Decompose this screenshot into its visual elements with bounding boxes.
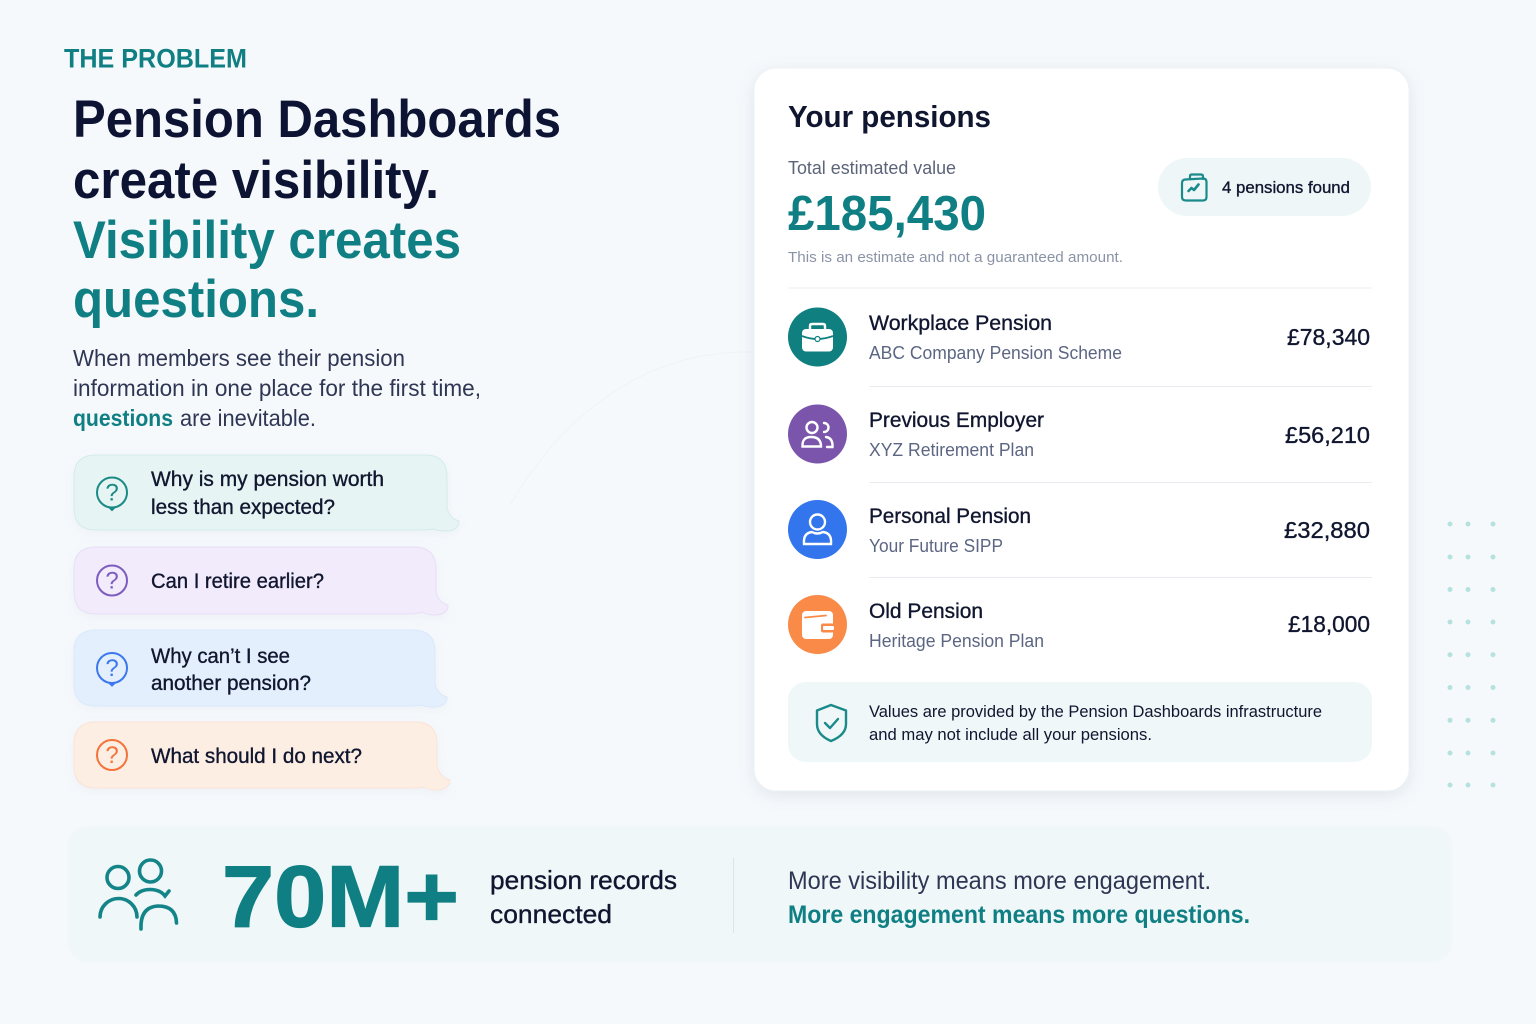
- row: workplace pension: Workplace Pension: [869, 311, 1052, 335]
- card heading: Your pensions: [788, 99, 991, 134]
- row: previous employer: XYZ Retirement Plan: [869, 440, 1034, 460]
- question bubble: another pension: Why can’t I see: [151, 645, 290, 668]
- intro paragraph: [73, 345, 481, 431]
- icon: question orange: [97, 740, 127, 770]
- title: create visibility.: [73, 151, 439, 210]
- row: old pension: [788, 595, 1370, 654]
- row: personal pension: Your Future SIPP: [869, 536, 1003, 556]
- icon: shield check: [817, 705, 846, 741]
- icon: wallet: [788, 595, 847, 654]
- title: Pension Dashboards: [73, 90, 561, 149]
- closing message: [788, 867, 1250, 929]
- row: workplace pension: [788, 308, 1370, 366]
- question bubble: retire earlier: [74, 547, 448, 615]
- row: previous employer: [788, 404, 1370, 464]
- icon: people: [788, 404, 847, 464]
- estimate disclaimer: This is an estimate and not a guaranteed amount.: [788, 249, 1123, 266]
- icon: question blue: [97, 653, 127, 686]
- closing message: More engagement means more questions.: [788, 901, 1250, 929]
- icon: briefcase: [788, 308, 847, 366]
- intro paragraph: questions: [73, 405, 173, 431]
- closing message: More visibility means more engagement.: [788, 867, 1211, 895]
- row: workplace pension: £78,340: [1287, 324, 1370, 350]
- icon: question orange: ?: [105, 742, 119, 769]
- total value label: Total estimated value: [788, 158, 956, 178]
- icon: question purple: ?: [105, 568, 119, 594]
- icon: question blue: ?: [105, 655, 119, 682]
- question bubble: another pension: another pension?: [151, 672, 311, 695]
- intro paragraph: are inevitable.: [180, 405, 316, 431]
- title: [73, 90, 561, 329]
- row: previous employer: £56,210: [1285, 422, 1370, 448]
- title: questions.: [73, 270, 319, 329]
- intro paragraph: When members see their pension: [73, 345, 405, 371]
- icon: question purple: [97, 566, 127, 596]
- icon: people group: [100, 860, 176, 929]
- decorative dot grid: [1448, 522, 1496, 788]
- stat label: [490, 865, 677, 929]
- callout: data source note: Values are provided by the Pension Dashboards infrastructure: [869, 703, 1322, 721]
- total value: £185,430: [788, 187, 986, 241]
- title: Visibility creates: [73, 211, 461, 270]
- stat label: connected: [490, 899, 612, 929]
- row: personal pension: £32,880: [1284, 517, 1370, 543]
- intro paragraph: information in one place for the first time,: [73, 375, 481, 401]
- callout: data source note: and may not include all your pensions.: [869, 726, 1152, 744]
- row: old pension: Old Pension: [869, 599, 983, 623]
- icon: question teal: ?: [105, 480, 119, 506]
- stat: 70M+: 70M+: [222, 848, 459, 946]
- pill: pensions found: [1158, 158, 1371, 216]
- eyebrow: the problem: THE PROBLEM: [64, 44, 247, 74]
- row: personal pension: Personal Pension: [869, 504, 1031, 528]
- row: personal pension: [788, 500, 1370, 559]
- question bubble: retire earlier: Can I retire earlier?: [151, 570, 324, 593]
- icon: briefcase chart: [1182, 174, 1206, 200]
- icon: person: [788, 500, 847, 559]
- question bubble: another pension: [74, 630, 447, 707]
- panel: bottom stat band: [68, 826, 1452, 962]
- row: workplace pension: ABC Company Pension Scheme: [869, 343, 1122, 363]
- panel: your pensions card: [754, 68, 1409, 791]
- question bubble: pension worth less: Why is my pension worth: [151, 468, 384, 491]
- pill: pensions found: 4 pensions found: [1222, 178, 1350, 197]
- row: previous employer: Previous Employer: [869, 408, 1044, 432]
- stat label: pension records: [490, 865, 677, 895]
- question bubble: do next: [74, 722, 450, 790]
- row: old pension: Heritage Pension Plan: [869, 631, 1044, 651]
- question bubble: pension worth less: [74, 455, 459, 531]
- icon: question teal: [97, 478, 127, 510]
- question bubble: pension worth less: less than expected?: [151, 496, 335, 519]
- question bubble: do next: What should I do next?: [151, 745, 362, 768]
- row: old pension: £18,000: [1288, 611, 1370, 637]
- callout: data source note: [788, 682, 1372, 762]
